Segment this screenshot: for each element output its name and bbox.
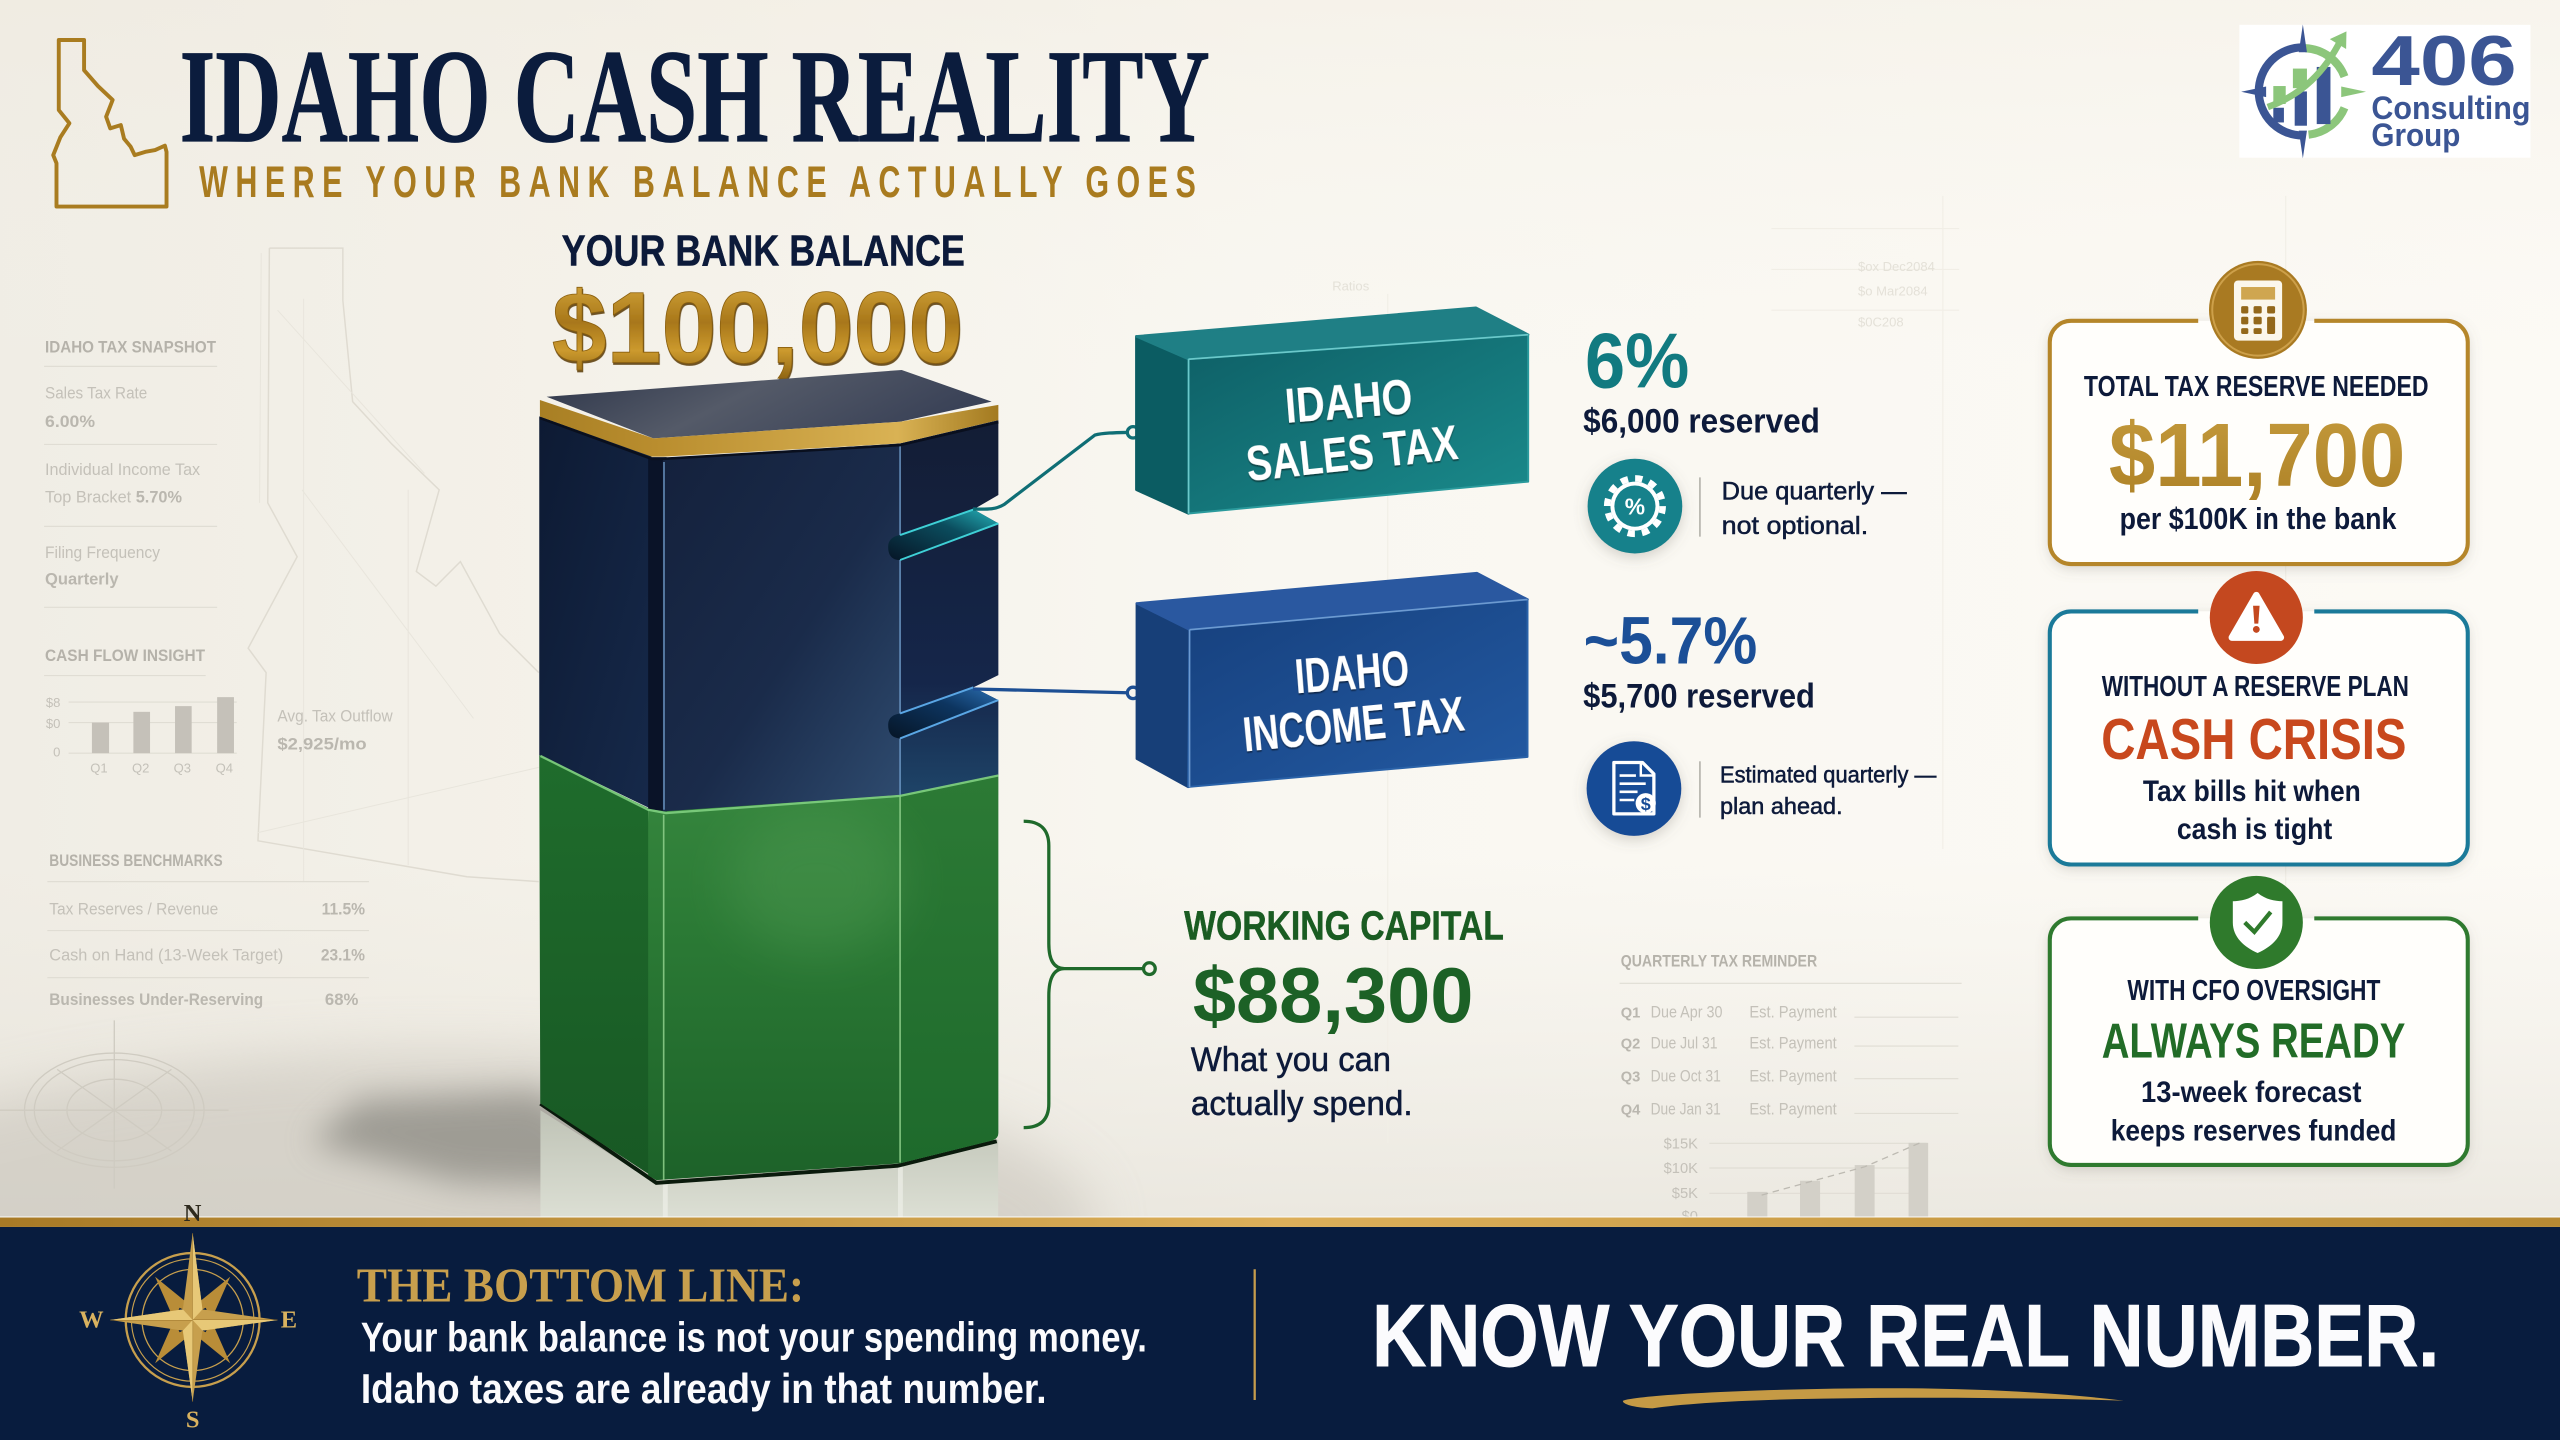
- ghost panel: quarterly tax reminder: Q3: [1621, 1070, 1640, 1086]
- panel: total tax reserve needed: [2050, 261, 2468, 564]
- slot: income tax notch: [888, 687, 998, 738]
- logo compass mark: [2241, 24, 2366, 158]
- icon: sales tax percent badge: %: [1625, 493, 1645, 519]
- text block: working capital: What you can: [1191, 1041, 1391, 1079]
- ghost panel: quarterly tax reminder: [1620, 953, 1962, 1118]
- panel: with CFO oversight: WITH CFO OVERSIGHT: [2127, 975, 2381, 1007]
- ghost panel: cash flow insight chart: 0: [53, 745, 60, 760]
- ghost panel: Idaho tax snapshot: Top Bracket 5.70%: [45, 489, 182, 507]
- stat: sales tax 6%: 6%: [1585, 316, 1689, 404]
- ghost panel: cash flow insight chart: Q3: [174, 761, 191, 776]
- ghost panel: cash flow insight chart: $8: [46, 695, 60, 710]
- faint compass sketch: [0, 1020, 229, 1189]
- ghost panel: cash flow insight chart: Q2: [132, 761, 149, 776]
- note: estimated quarterly: Estimated quarterly —: [1720, 762, 1936, 788]
- faint top labels: $ox Dec2084: [1858, 259, 1935, 274]
- icon: calculator: [2209, 261, 2307, 359]
- icon: warning triangle: [2210, 571, 2303, 664]
- ghost panel: quarterly tax reminder: Q1: [1621, 1005, 1640, 1021]
- bracket: working capital: [1024, 821, 1155, 1128]
- ghost panel: cash flow insight chart: $0: [46, 716, 60, 731]
- icon: income tax document badge: [1587, 741, 1681, 836]
- ghost panel: quarterly tax reminder: Est. Payment: [1749, 1034, 1837, 1052]
- ghost panel: business benchmarks: [47, 852, 369, 1009]
- faint top labels: $0C208: [1858, 315, 1904, 330]
- panel: without a reserve plan: Tax bills hit when: [2143, 775, 2361, 808]
- column segment: working capital green: [539, 755, 998, 1183]
- text block: working capital: [1184, 903, 1504, 1123]
- ghost bar chart: $10K: [1664, 1161, 1698, 1177]
- panel: total tax reserve needed: per $100K in the bank: [2120, 503, 2397, 536]
- ghost panel: cash flow insight chart: $2,925/mo: [277, 735, 367, 753]
- underline swoosh: [1623, 1388, 2124, 1408]
- ghost panel: cash flow insight chart: CASH FLOW INSIGHT: [45, 647, 205, 665]
- panel: without a reserve plan: WITHOUT A RESERVE PLAN: [2102, 671, 2409, 703]
- ghost panel: cash flow insight chart: [44, 647, 393, 776]
- icon: gold compass rose: N: [184, 1200, 202, 1227]
- ghost panel: Idaho tax snapshot: Quarterly: [45, 570, 119, 588]
- ghost panel: cash flow insight chart: Avg. Tax Outflow: [277, 708, 393, 726]
- note: due quarterly: not optional.: [1722, 512, 1868, 540]
- icon: sales tax percent badge: [1588, 459, 1682, 553]
- footer band: [0, 1216, 2560, 1440]
- text block: working capital: actually spend.: [1191, 1085, 1413, 1123]
- ghost panel: business benchmarks: BUSINESS BENCHMARKS: [49, 852, 223, 870]
- ghost panel: cash flow insight chart: Q1: [90, 761, 108, 776]
- ghost panel: business benchmarks: 23.1%: [321, 947, 365, 965]
- stat: sales tax 6%: [1583, 316, 1820, 441]
- ghost panel: quarterly tax reminder: Est. Payment: [1749, 1068, 1837, 1086]
- ghost panel: cash flow insight chart: Q4: [216, 761, 233, 776]
- stat: sales tax 6%: $6,000 reserved: [1583, 403, 1820, 441]
- note: estimated quarterly: plan ahead.: [1720, 793, 1843, 819]
- text block: working capital: $88,300: [1193, 951, 1473, 1039]
- ghost panel: Idaho tax snapshot: Filing Frequency: [45, 544, 161, 562]
- block: Idaho sales tax: SALES TAX: [1244, 416, 1461, 492]
- ghost panel: quarterly tax reminder: Due Jan 31: [1651, 1100, 1721, 1118]
- bottom line text: Your bank balance is not your spending money.: [361, 1314, 1147, 1361]
- ghost panel: business benchmarks: 11.5%: [322, 901, 366, 919]
- ghost panel: business benchmarks: Businesses Under-Reserving: [49, 991, 263, 1009]
- note: estimated quarterly: [1700, 761, 1936, 819]
- title: IDAHO CASH REALITY: [180, 22, 1210, 170]
- heading: your bank balance: YOUR BANK BALANCE: [562, 227, 965, 275]
- logo: 406 Consulting Group: Consulting: [2371, 89, 2530, 126]
- ghost panel: quarterly tax reminder: Est. Payment: [1749, 1003, 1837, 1021]
- panel: without a reserve plan: [2050, 571, 2468, 864]
- block: Idaho income tax: [1137, 573, 1528, 787]
- block: Idaho sales tax: [1136, 308, 1528, 513]
- subtitle: WHERE YOUR BANK BALANCE ACTUALLY GOES: [199, 158, 1203, 207]
- icon: shield check: [2210, 876, 2303, 969]
- faint Idaho map sketch: [248, 248, 539, 882]
- block: Idaho sales tax: IDAHO: [1283, 370, 1414, 434]
- text block: working capital: WORKING CAPITAL: [1184, 903, 1504, 949]
- ghost panel: quarterly tax reminder: Due Jul 31: [1651, 1034, 1718, 1052]
- slot: sales tax notch: [888, 509, 998, 560]
- connector: income tax: [973, 687, 1139, 699]
- ghost bar chart: $5K: [1672, 1186, 1698, 1202]
- panel: total tax reserve needed: $11,700: [2109, 406, 2405, 506]
- ghost panel: quarterly tax reminder: Est. Payment: [1749, 1100, 1837, 1118]
- connector: sales tax: [973, 427, 1139, 509]
- stat: income tax 5.7%: $5,700 reserved: [1583, 678, 1815, 716]
- stat: income tax 5.7%: [1583, 604, 1815, 716]
- logo: 406 Consulting Group: [2239, 21, 2530, 158]
- icon: income tax document badge: $: [1641, 794, 1651, 814]
- note: due quarterly: Due quarterly —: [1722, 478, 1907, 506]
- faint top labels: [1332, 259, 1935, 330]
- ghost panel: Idaho tax snapshot: [44, 338, 217, 607]
- bank balance amount: $100,000: [552, 271, 963, 384]
- faint top labels: $o Mar2084: [1858, 284, 1928, 299]
- ghost bar chart: $0: [1682, 1209, 1698, 1225]
- icon: gold compass rose: S: [186, 1407, 199, 1434]
- panel: with CFO oversight: 13-week forecast: [2141, 1076, 2362, 1109]
- ghost panel: quarterly tax reminder: QUARTERLY TAX REMINDER: [1621, 953, 1817, 971]
- ghost panel: quarterly tax reminder: Q4: [1621, 1102, 1641, 1118]
- ghost panel: Idaho tax snapshot: 6.00%: [45, 413, 96, 431]
- logo: 406 Consulting Group: 406: [2371, 21, 2517, 100]
- note: due quarterly: [1700, 477, 1907, 540]
- panel: total tax reserve needed: TOTAL TAX RESERVE NEEDED: [2084, 371, 2429, 403]
- ghost panel: Idaho tax snapshot: Individual Income Tax: [45, 461, 200, 479]
- ghost panel: quarterly tax reminder: Due Apr 30: [1651, 1003, 1722, 1021]
- panel: without a reserve plan: cash is tight: [2177, 813, 2332, 846]
- ghost bar chart: [1664, 1136, 1928, 1225]
- chart: stacked 3D cash column: [539, 370, 998, 1183]
- ghost panel: business benchmarks: Tax Reserves / Revenue: [49, 901, 218, 919]
- icon: gold compass rose: W: [79, 1306, 104, 1333]
- icon: gold compass rose: E: [281, 1306, 297, 1333]
- ghost panel: business benchmarks: 68%: [325, 991, 359, 1009]
- panel: with CFO oversight: [2050, 876, 2468, 1165]
- footer divider: [1254, 1269, 1256, 1400]
- ghost panel: Idaho tax snapshot: Sales Tax Rate: [45, 384, 147, 402]
- panel: without a reserve plan: CASH CRISIS: [2101, 708, 2407, 772]
- stat: income tax 5.7%: ~5.7%: [1584, 604, 1757, 679]
- block: Idaho income tax: INCOME TAX: [1241, 688, 1467, 763]
- bottom line text: Idaho taxes are already in that number.: [361, 1365, 1047, 1412]
- block: Idaho income tax: IDAHO: [1293, 642, 1411, 704]
- ghost panel: quarterly tax reminder: Due Oct 31: [1651, 1068, 1721, 1086]
- ghost panel: quarterly tax reminder: Q2: [1621, 1036, 1640, 1052]
- bottom line heading: THE BOTTOM LINE:: [357, 1258, 804, 1313]
- panel: with CFO oversight: keeps reserves funded: [2111, 1114, 2396, 1147]
- logo: 406 Consulting Group: Group: [2371, 116, 2460, 153]
- column lid: [540, 370, 998, 459]
- ghost panel: business benchmarks: Cash on Hand (13-Week Target): [49, 947, 283, 965]
- faint top labels: Ratios: [1332, 279, 1370, 294]
- ghost bar chart: $15K: [1664, 1136, 1698, 1152]
- icon: gold compass rose: [79, 1200, 297, 1434]
- ghost panel: Idaho tax snapshot: IDAHO TAX SNAPSHOT: [45, 338, 216, 356]
- icon: Idaho state outline: [53, 40, 167, 207]
- bottom line text: [361, 1314, 1147, 1412]
- panel: with CFO oversight: ALWAYS READY: [2102, 1014, 2405, 1068]
- column segment: tax reserves navy: [539, 416, 998, 813]
